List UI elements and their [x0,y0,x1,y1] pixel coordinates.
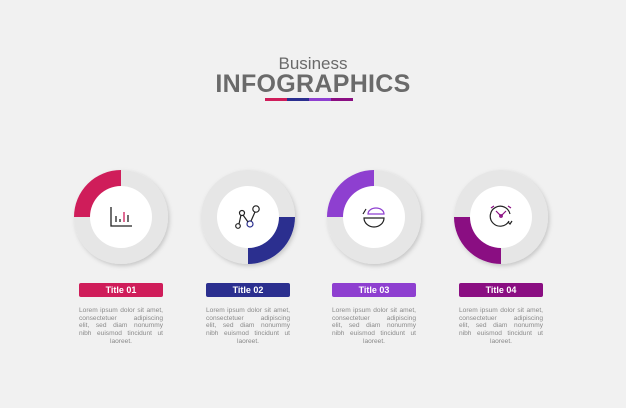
text 01: nibh euismod tincidunt ut [79,330,163,337]
title bar 04 [459,283,543,297]
icon: bar chart [111,207,132,226]
circle 2 [201,170,295,264]
text 04: Lorem ipsum dolor sit amet, [459,307,543,314]
title bar 02: Title 02 [233,285,263,295]
text 01: elit, sed diam nonummy [79,322,163,329]
title bar 03 [332,283,416,297]
title bar 01: Title 01 [106,285,136,295]
text 04 [459,307,543,345]
text 03: nibh euismod tincidunt ut [332,330,416,337]
text 02: Lorem ipsum dolor sit amet, [206,307,290,314]
icon: network [236,206,259,228]
text 01: consectetuer adipiscing [79,315,163,322]
icon: clock [490,206,512,226]
text 02: elit, sed diam nonummy [206,322,290,329]
title bar 02 [206,283,290,297]
text 02: nibh euismod tincidunt ut [206,330,290,337]
heading: INFOGRAPHICS: INFOGRAPHICS [215,70,411,98]
title bar 04: Title 04 [486,285,516,295]
text 02 [206,307,290,345]
title bar 01 [79,283,163,297]
circle 1 [74,170,168,264]
underline [265,98,353,101]
text 04: nibh euismod tincidunt ut [459,330,543,337]
text 01: laoreet. [110,338,132,345]
title bar 03: Title 03 [359,285,389,295]
text 03: consectetuer adipiscing [332,315,416,322]
text 04: laoreet. [490,338,512,345]
text 03: elit, sed diam nonummy [332,322,416,329]
text 03: Lorem ipsum dolor sit amet, [332,307,416,314]
text 03 [332,307,416,345]
subtitle: Business: Business [278,54,347,73]
icon: pie [363,208,384,227]
text 01: Lorem ipsum dolor sit amet, [79,307,163,314]
text 02: laoreet. [237,338,259,345]
circle 4 [454,170,548,264]
text 02: consectetuer adipiscing [206,315,290,322]
text 04: elit, sed diam nonummy [459,322,543,329]
text 03: laoreet. [363,338,385,345]
text 01 [79,307,163,345]
circle 3 [327,170,421,264]
title [215,54,411,101]
text 04: consectetuer adipiscing [459,315,543,322]
